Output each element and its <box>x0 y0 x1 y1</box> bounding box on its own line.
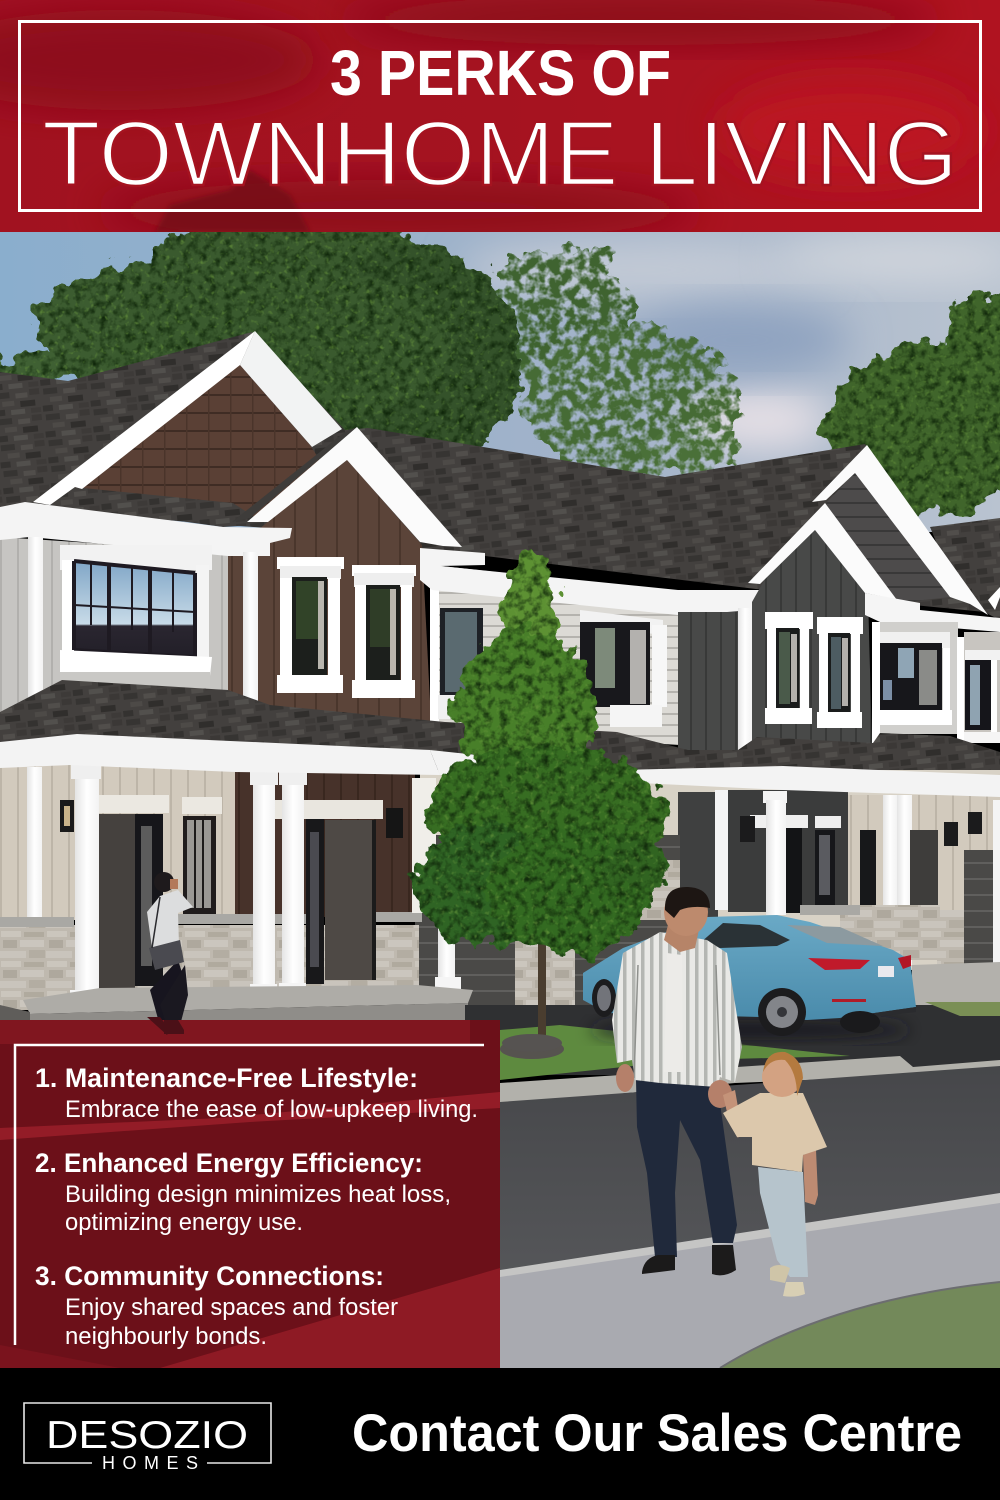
perk 1 <box>35 1063 478 1123</box>
brown wall windows <box>277 557 416 698</box>
walking man's tinted feet <box>147 1017 184 1035</box>
footer bar <box>0 1368 1000 1500</box>
left porch eave <box>0 734 440 775</box>
upper roofs <box>0 332 1000 620</box>
walking man <box>147 872 193 1033</box>
perk 2: optimizing energy use. <box>65 1209 303 1236</box>
logo: Desozio Homes: DESOZIO <box>46 1414 248 1457</box>
perk 1: Embrace the ease of low-upkeep living. <box>65 1096 478 1123</box>
car <box>583 915 916 1040</box>
porch roofs <box>0 680 1000 778</box>
left upper wall and eave <box>0 502 292 720</box>
father <box>612 887 742 1275</box>
panel: three perks <box>0 1017 500 1368</box>
sparse background tree <box>490 245 740 475</box>
right upper windows <box>765 612 1000 744</box>
daughter <box>723 1052 827 1297</box>
street tree <box>415 553 670 1052</box>
perk 2: 2. Enhanced Energy Efficiency: <box>35 1148 423 1178</box>
right ground floor <box>420 750 1000 1005</box>
central garage <box>415 835 680 1005</box>
scene: townhome rendering <box>0 205 1000 1368</box>
banner frame <box>20 22 980 210</box>
perk 1: 1. Maintenance-Free Lifestyle: <box>35 1063 418 1093</box>
logo: Desozio Homes: HOMES <box>102 1453 198 1473</box>
heading line one: 3 PERKS OF <box>330 37 671 109</box>
perk 3: 3. Community Connections: <box>35 1261 384 1291</box>
street and driveway <box>465 1002 1000 1368</box>
dark right wall <box>678 445 1000 752</box>
left upper window <box>60 545 212 688</box>
call to action: Contact Our Sales Centre <box>352 1404 962 1463</box>
perk 3: neighbourly bonds. <box>65 1323 267 1350</box>
perk 3 <box>35 1261 398 1350</box>
doors and windows, left ground floor <box>60 795 403 989</box>
sky <box>0 232 1000 532</box>
porch floor <box>0 985 473 1022</box>
heading line two: TOWNHOME LIVING <box>42 103 958 205</box>
perk 2 <box>35 1148 451 1236</box>
brown centre wall <box>228 427 462 740</box>
background trees <box>0 205 1000 515</box>
logo: Desozio Homes <box>24 1403 271 1473</box>
perk 3: Enjoy shared spaces and foster <box>65 1294 398 1321</box>
panel frame lines <box>15 1045 484 1345</box>
porch columns <box>70 765 461 1005</box>
left gable <box>33 331 345 527</box>
title banner <box>0 0 1000 240</box>
left ground floor walls <box>0 765 436 1010</box>
centre white wall <box>420 548 783 745</box>
perk 2: Building design minimizes heat loss, <box>65 1181 451 1208</box>
